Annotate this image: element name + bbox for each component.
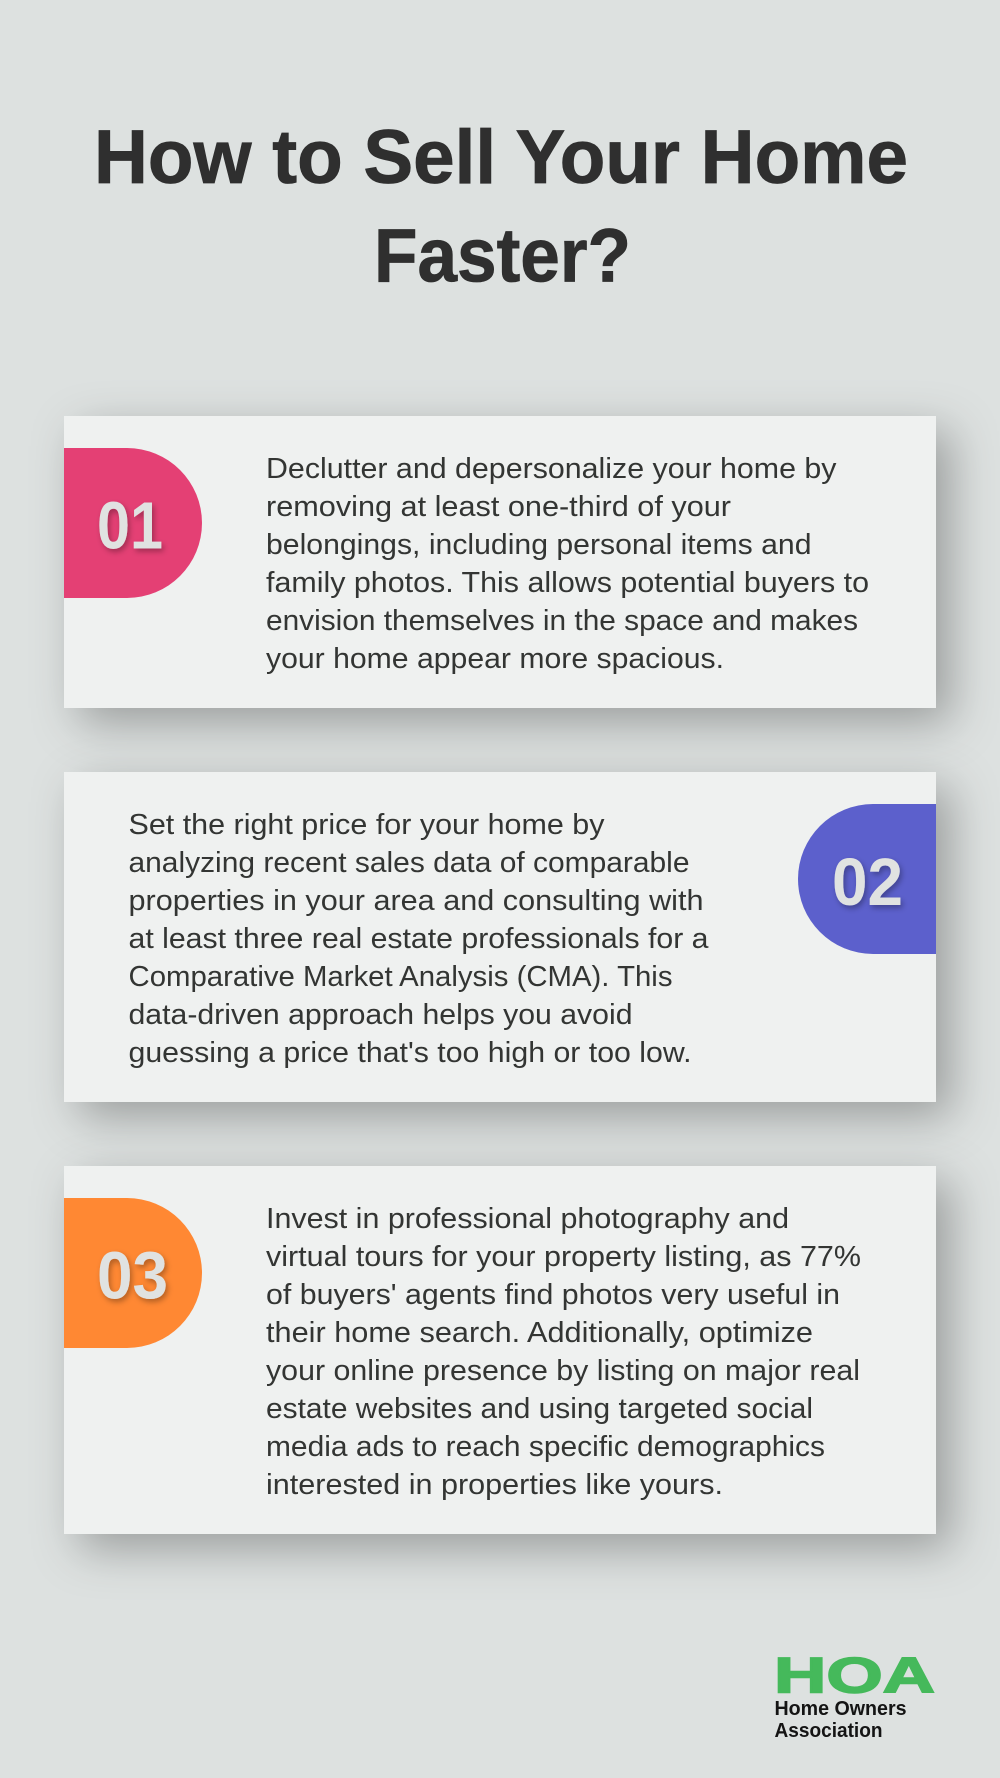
- text: step 2 body: Comparative Market Analysis (CMA). This: [128, 961, 672, 993]
- text: step 2 body: [128, 809, 709, 1069]
- text: step 1 body: envision themselves in the space and makes: [266, 605, 858, 637]
- panel: step 2: [64, 772, 936, 1102]
- text: step 1 body: your home appear more spacious.: [266, 643, 724, 675]
- badge: 03: [64, 1198, 202, 1348]
- text: step 2 body: analyzing recent sales data of comparable: [128, 847, 690, 879]
- panel: step 3: [64, 1166, 936, 1534]
- logo: HOA Home Owners Association: [774, 1648, 935, 1742]
- title: Faster?: [374, 214, 631, 298]
- badge: 02: [798, 804, 936, 954]
- text: step 1 body: belongings, including personal items and: [266, 529, 812, 561]
- text: step 2 body: guessing a price that's too high or too low.: [128, 1037, 692, 1069]
- text: step 3 body: media ads to reach specific demographics: [266, 1431, 825, 1463]
- badge: 01: [64, 448, 202, 598]
- logo: HOA Home Owners Association: HOA: [774, 1648, 935, 1704]
- title: [94, 115, 908, 298]
- text: step 3 body: your online presence by listing on major real: [266, 1355, 860, 1387]
- text: step 3 body: interested in properties like yours.: [266, 1469, 723, 1501]
- logo: HOA Home Owners Association: Association: [774, 1720, 882, 1742]
- badge: 02: 02: [832, 845, 903, 920]
- text: step 2 body: properties in your area and consulting with: [128, 885, 704, 917]
- text: step 3 body: of buyers' agents find photos very useful in: [266, 1279, 840, 1311]
- panel: step 1: [64, 416, 936, 708]
- badge: 03: 03: [97, 1238, 168, 1314]
- text: step 2 body: Set the right price for your home by: [128, 809, 605, 841]
- text: step 2 body: data-driven approach helps you avoid: [128, 999, 632, 1031]
- text: step 1 body: [266, 453, 869, 675]
- text: step 3 body: their home search. Additionally, optimize: [266, 1317, 813, 1349]
- text: step 3 body: [266, 1203, 861, 1501]
- text: step 3 body: virtual tours for your property listing, as 77%: [266, 1241, 861, 1273]
- text: step 1 body: Declutter and depersonalize your home by: [266, 453, 837, 485]
- logo: HOA Home Owners Association: Home Owners: [774, 1698, 906, 1720]
- text: step 2 body: at least three real estate professionals for a: [128, 923, 709, 955]
- text: step 3 body: estate websites and using targeted social: [266, 1393, 813, 1425]
- text: step 1 body: family photos. This allows potential buyers to: [266, 567, 869, 599]
- text: step 3 body: Invest in professional photography and: [266, 1203, 789, 1235]
- title: How to Sell Your Home: [94, 115, 908, 200]
- text: step 1 body: removing at least one-third of your: [266, 491, 731, 523]
- badge: 01: 01: [97, 488, 163, 564]
